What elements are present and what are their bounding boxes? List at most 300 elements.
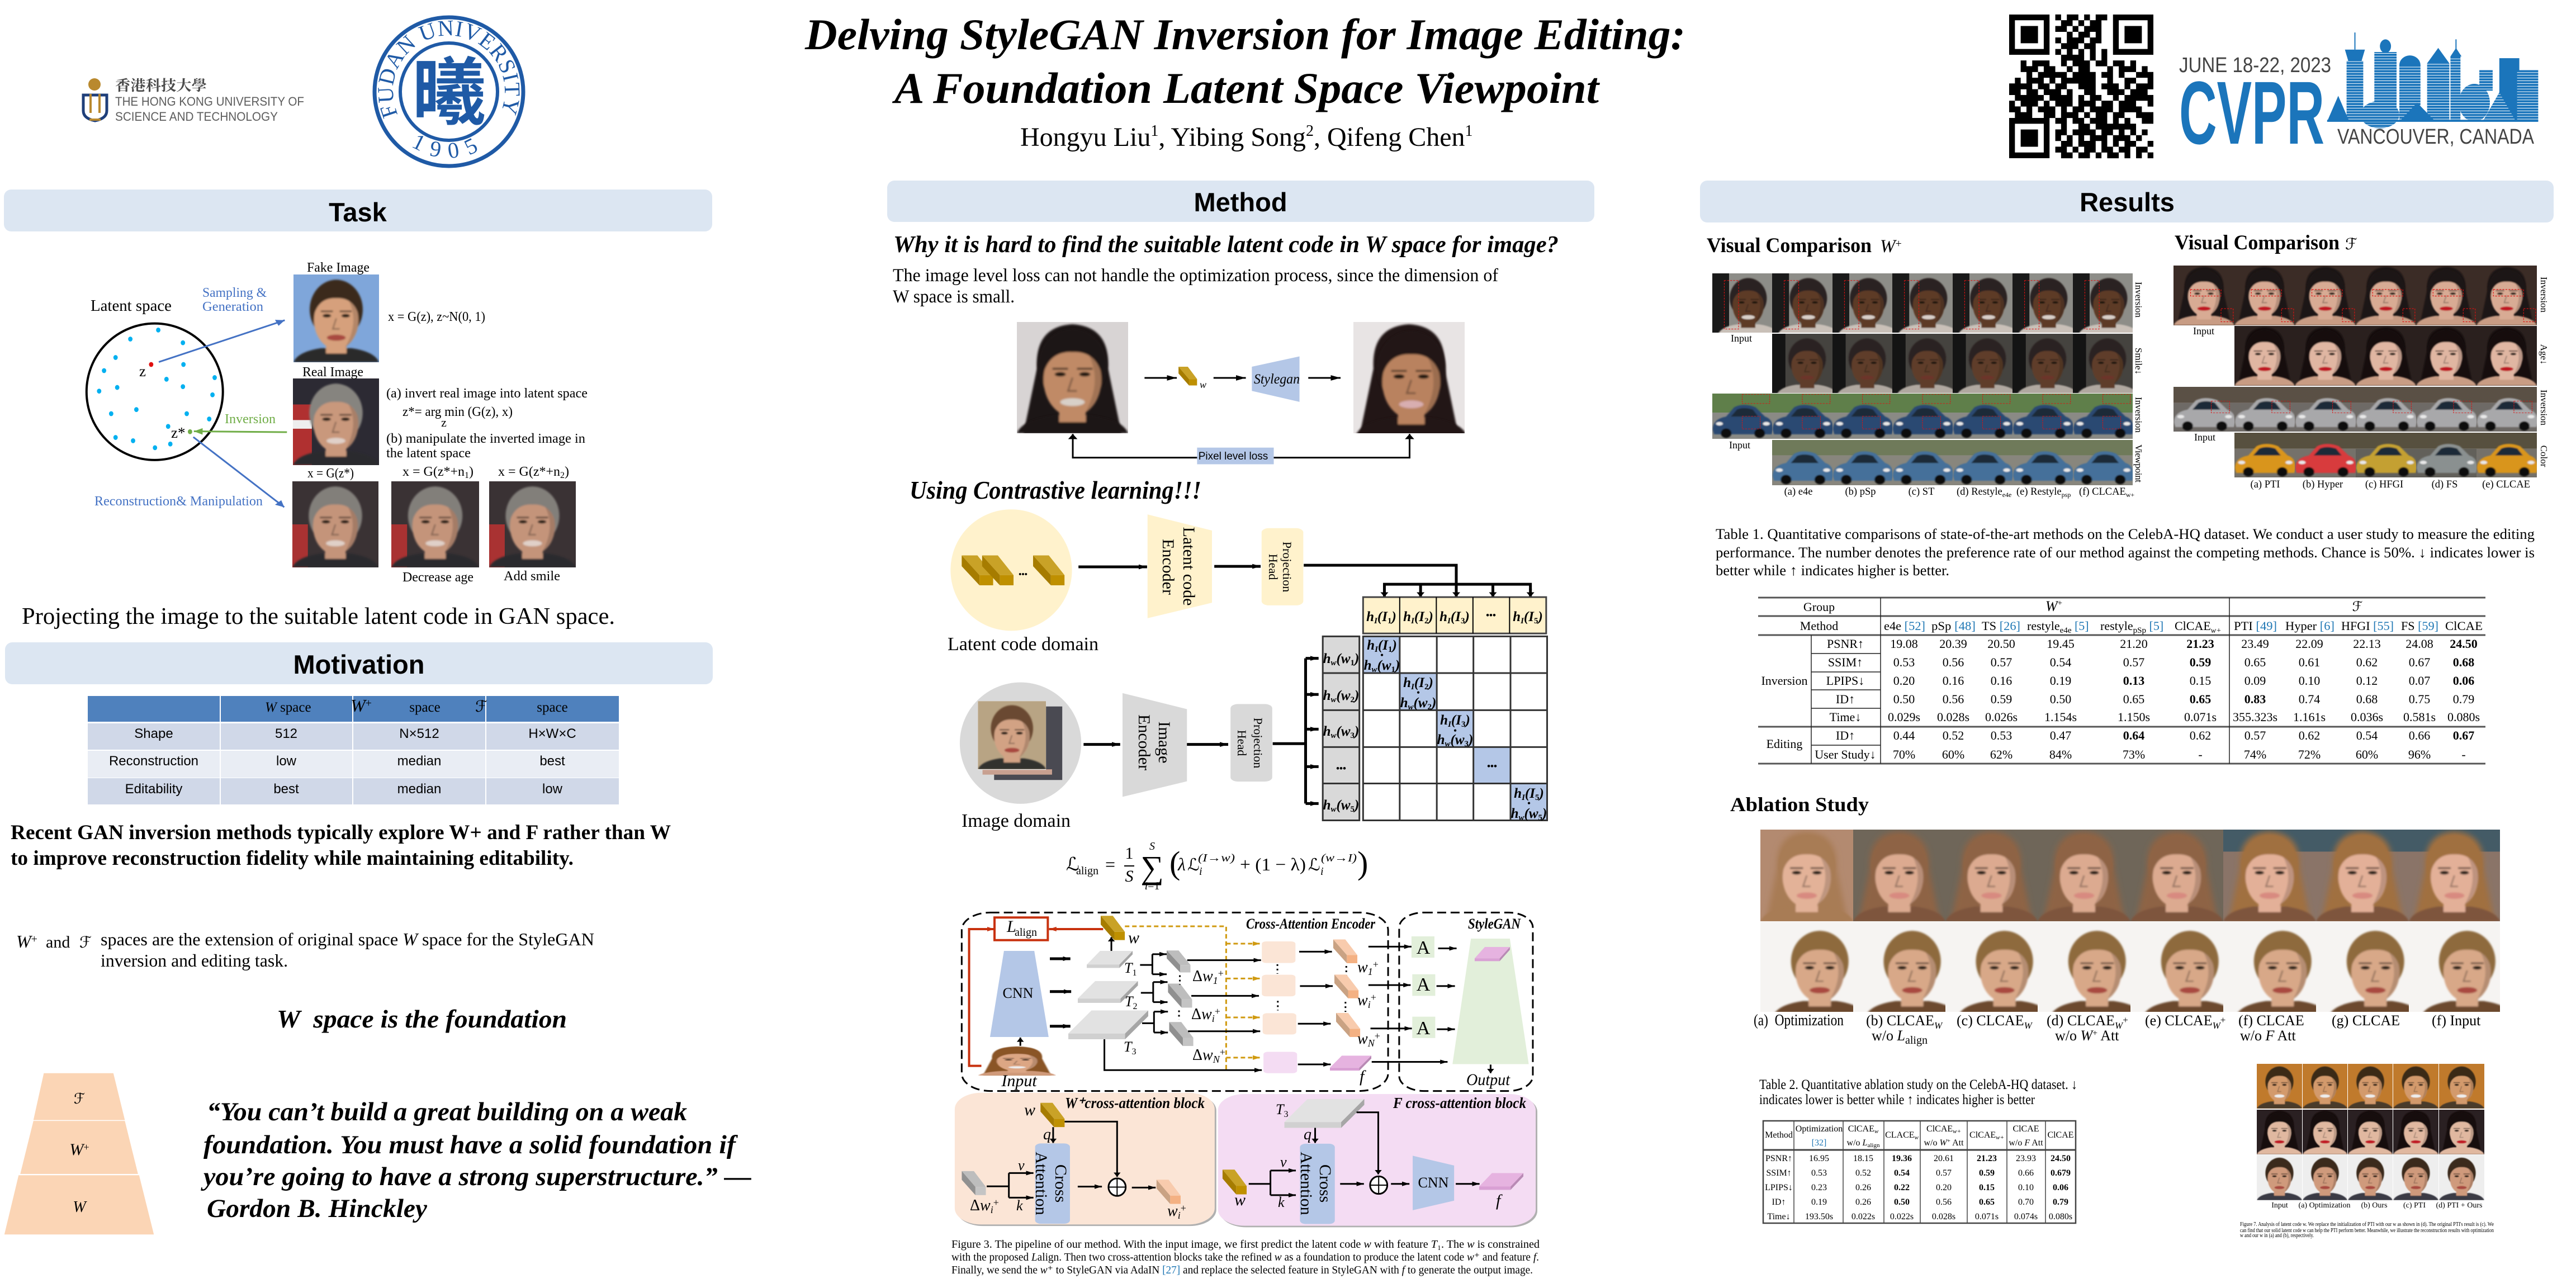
table 1: Editing bbox=[1767, 737, 1802, 751]
table 1: 72% bbox=[2298, 747, 2321, 761]
grid labels: h bbox=[1511, 806, 1519, 821]
table 1: 0.080s bbox=[2447, 710, 2480, 724]
table 1: 0.62 bbox=[2299, 728, 2320, 742]
title: Delving StyleGAN Inversion for Image Editing: bbox=[804, 10, 1685, 59]
cross-attention encoder shapes bbox=[962, 912, 1533, 1091]
grid labels: ) bbox=[1390, 609, 1396, 624]
table 1: - bbox=[2461, 747, 2466, 761]
table: latent spaces: + bbox=[366, 697, 372, 709]
formula: alignment loss: ) bbox=[1357, 845, 1368, 881]
image encoder text: Encoder bbox=[1135, 714, 1153, 770]
task labels: Real Image bbox=[302, 365, 363, 380]
table 1: 0.44 bbox=[1893, 728, 1915, 742]
grid labels: ( bbox=[1378, 638, 1384, 653]
table: latent spaces: W space bbox=[265, 700, 311, 715]
table 1: 1.154s bbox=[2044, 710, 2077, 724]
table 2: 0.50 bbox=[1894, 1197, 1910, 1207]
labels: figure 7: (a) Optimization bbox=[2299, 1201, 2350, 1210]
grid labels: h bbox=[1400, 695, 1408, 711]
grid labels: w bbox=[1341, 724, 1351, 739]
caption: figure 7: Figure 7. Analysis of latent code w. We replace the initialization of PTI with our w as shown in (d). The original PTI's result is (c). We bbox=[2240, 1221, 2494, 1228]
table 2: 21.23 bbox=[1977, 1154, 1997, 1163]
table 2: Method bbox=[1765, 1130, 1793, 1140]
grid labels: h bbox=[1323, 651, 1331, 666]
table 1: 0.57 bbox=[2123, 655, 2144, 669]
grid labels: • bbox=[1453, 726, 1457, 736]
grid labels: • bbox=[1380, 651, 1384, 660]
table 1: 1.161s bbox=[2293, 710, 2326, 724]
table 1: 0.16 bbox=[1943, 674, 1964, 688]
table 1: 0.10 bbox=[2299, 674, 2320, 688]
table 1: PSNR↑ bbox=[1827, 637, 1864, 651]
table 1: w+ bbox=[2211, 627, 2222, 635]
diagram: pixel level loss: w bbox=[1200, 379, 1206, 390]
table 2: Optimization bbox=[1796, 1124, 1843, 1134]
grid labels: 3 bbox=[1465, 740, 1469, 749]
labels: align bbox=[1905, 1034, 1928, 1046]
blocks text bbox=[970, 1095, 1526, 1221]
table 2: 0.022s bbox=[1852, 1212, 1875, 1221]
grid labels: I bbox=[1374, 645, 1379, 654]
grid labels: I bbox=[1455, 609, 1461, 624]
cross-attention encoder text: align bbox=[1015, 926, 1037, 939]
labels: (b) CLCAE bbox=[1866, 1012, 1934, 1029]
table 2: 0.54 bbox=[1894, 1168, 1910, 1178]
latent encoder text bbox=[948, 527, 1294, 655]
latent encoder text: Latent code bbox=[1180, 527, 1198, 605]
table 1: pSp bbox=[2133, 626, 2146, 635]
table 1: Method bbox=[1800, 619, 1838, 633]
table 1: pSp [48] bbox=[1931, 619, 1976, 633]
labels: W bbox=[2115, 1020, 2124, 1031]
cross-attention encoder text: i bbox=[1368, 999, 1371, 1010]
logo: HKUST bbox=[83, 74, 304, 124]
caption: table 2: indicates lower is better while ↑ indicates higher is better bbox=[1759, 1092, 2035, 1107]
task labels bbox=[91, 261, 588, 585]
cross-attention encoder text: 1 bbox=[1213, 975, 1218, 986]
table 2: 0.19 bbox=[1811, 1197, 1827, 1207]
grid labels: 1 bbox=[1351, 659, 1355, 667]
table 2: w bbox=[1915, 1134, 1919, 1141]
grid labels: h bbox=[1437, 732, 1445, 747]
diagram: pixel level loss: Pixel level loss bbox=[1199, 451, 1268, 462]
table 1: 0.13 bbox=[2123, 674, 2144, 688]
task labels: Decrease age bbox=[402, 570, 473, 585]
grid labels: I bbox=[1410, 683, 1415, 692]
labels: Input bbox=[2193, 325, 2214, 337]
grid labels: ( bbox=[1451, 713, 1457, 728]
grid labels: ) bbox=[1427, 609, 1433, 624]
authors: , Qifeng Chen bbox=[1314, 122, 1465, 152]
grid labels: w bbox=[1382, 658, 1391, 673]
heading: contrastive learning: Using Contrastive learning!!! bbox=[910, 476, 1201, 504]
grid labels: h bbox=[1513, 609, 1521, 624]
grid labels: 1 bbox=[1388, 645, 1392, 654]
quote bbox=[201, 1097, 751, 1223]
cross-attention encoder text: f bbox=[1360, 1067, 1366, 1086]
grid labels: ( bbox=[1414, 695, 1419, 711]
table 1: 0.67 bbox=[2409, 655, 2430, 669]
table 1: ID↑ bbox=[1836, 728, 1855, 742]
pyramid: latent spaces bbox=[4, 1073, 154, 1234]
table 2: w/o W bbox=[1924, 1138, 1947, 1148]
task labels: Reconstruction& Manipulation bbox=[94, 494, 263, 509]
cross-attention encoder text: Δw bbox=[1191, 1006, 1212, 1023]
table 1: 70% bbox=[1893, 747, 1915, 761]
table 1: 0.071s bbox=[2184, 710, 2217, 724]
table 2: ClCAE bbox=[2012, 1124, 2039, 1134]
logo: CVPR 2023: VANCOUVER, CANADA bbox=[2337, 125, 2535, 149]
table 1: SSIM↑ bbox=[1828, 655, 1863, 669]
table 2: 0.06 bbox=[2053, 1183, 2068, 1192]
formula: alignment loss: ∑ bbox=[1140, 849, 1164, 886]
grid labels: ••• bbox=[1486, 610, 1496, 621]
grid labels: w bbox=[1445, 740, 1451, 749]
labels: figure 7: (d) PTI + Ours bbox=[2436, 1201, 2482, 1210]
table 2: 20.61 bbox=[1934, 1154, 1954, 1163]
panel: figure 7 images bbox=[2257, 1064, 2484, 1200]
task labels: x = G(z*) bbox=[307, 466, 354, 481]
labels: + bbox=[2220, 1015, 2225, 1025]
grid labels: 1 bbox=[1391, 665, 1395, 674]
task labels: (a) invert real image into latent space bbox=[386, 386, 588, 401]
grid labels: ) bbox=[1394, 658, 1400, 673]
grid labels: 5 bbox=[1535, 793, 1539, 802]
labels: Att bbox=[2097, 1027, 2119, 1044]
table 1: 19.08 bbox=[1890, 637, 1918, 651]
table 1 bbox=[1758, 598, 2485, 764]
heading: W bbox=[1880, 236, 1895, 257]
grid labels: I bbox=[1530, 786, 1535, 801]
table 1: 0.026s bbox=[1985, 710, 2018, 724]
table 2: CLACE bbox=[1885, 1130, 1915, 1140]
cross-attention encoder text: 1 bbox=[1368, 966, 1373, 977]
table 2: align bbox=[1867, 1142, 1880, 1149]
table 1: 0.56 bbox=[1943, 692, 1964, 706]
labels: Input bbox=[2194, 432, 2215, 443]
table 1: 0.67 bbox=[2453, 728, 2474, 742]
task labels: Add smile bbox=[504, 569, 560, 584]
blocks text: q bbox=[1043, 1126, 1051, 1143]
grid labels: h bbox=[1323, 724, 1331, 739]
table 1: 73% bbox=[2123, 747, 2145, 761]
table: latent spaces: best bbox=[539, 754, 565, 769]
table 1: TS [26] bbox=[1982, 619, 2020, 633]
table 1: PTI [49] bbox=[2234, 619, 2277, 633]
table 1: 0.54 bbox=[2050, 655, 2071, 669]
cross-attention encoder text: Output bbox=[1466, 1071, 1510, 1089]
caption: figure 7: w and our w in (a) and (b), respectively. bbox=[2240, 1233, 2314, 1239]
image branch bbox=[960, 636, 1547, 820]
logo: CVPR 2023: JUNE 18-22, 2023 bbox=[2179, 54, 2331, 77]
blocks text: f bbox=[1496, 1191, 1503, 1210]
grid labels: ( bbox=[1524, 609, 1530, 624]
caption: table 1: performance. The number denotes the preference rate of our method against the competing methods. Chance is 50%. ↓ indicates lower is bbox=[1716, 544, 2535, 561]
latent code branch bbox=[950, 509, 1546, 633]
blocks text: F cross-attention block bbox=[1393, 1095, 1526, 1111]
grid labels: ) bbox=[1541, 806, 1547, 821]
table 1: User Study↓ bbox=[1815, 747, 1876, 761]
table 2: 0.79 bbox=[2053, 1197, 2068, 1207]
table 1: 0.15 bbox=[2190, 674, 2211, 688]
table 2: 0.20 bbox=[1936, 1183, 1952, 1192]
task labels: Fake Image bbox=[307, 261, 370, 275]
caption: table 1: Table 1. Quantitative comparisons of state-of-the-art methods on the CelebA-HQ dataset. We conduct a user study to measure the editing bbox=[1716, 526, 2535, 542]
labels: + bbox=[2123, 1015, 2128, 1025]
table 1: 0.16 bbox=[1991, 674, 2012, 688]
table 2: 0.26 bbox=[1855, 1183, 1871, 1192]
cross-attention encoder text: i bbox=[1212, 1013, 1215, 1024]
grid labels: 3 bbox=[1461, 720, 1465, 729]
table 1: 0.12 bbox=[2356, 674, 2378, 688]
grid labels: 3 bbox=[1461, 617, 1465, 626]
labels: (c) CLCAE bbox=[1957, 1012, 2024, 1029]
table 2: 0.074s bbox=[2014, 1212, 2038, 1221]
table: latent spaces: Editability bbox=[125, 782, 182, 797]
heading: W space is the foundation: W space is the foundation bbox=[277, 1005, 567, 1033]
table 1: ClCAE bbox=[2445, 619, 2483, 633]
formula: alignment loss: ℒ bbox=[1066, 853, 1079, 875]
grid labels: h bbox=[1403, 675, 1411, 690]
grid labels: ) bbox=[1353, 688, 1359, 703]
grid labels: 1 bbox=[1388, 617, 1391, 626]
table 1: restyle bbox=[2100, 619, 2133, 633]
table 1: 60% bbox=[1942, 747, 1964, 761]
grid labels: w bbox=[1331, 695, 1337, 704]
cross-attention encoder text: + bbox=[1373, 959, 1379, 970]
authors: 1 bbox=[1150, 122, 1158, 140]
table 1: 0.68 bbox=[2453, 655, 2474, 669]
table 1: 0.56 bbox=[1943, 655, 1964, 669]
table 2: 0.26 bbox=[1855, 1197, 1871, 1207]
table 1: 0.74 bbox=[2299, 692, 2320, 706]
blocks text: i bbox=[1178, 1210, 1181, 1221]
cross-attention encoder text: w bbox=[1357, 1030, 1368, 1048]
table: latent spaces: space bbox=[409, 700, 441, 715]
labels: (a) e4e bbox=[1784, 486, 1812, 498]
grid labels: 2 bbox=[1424, 617, 1428, 626]
table 1: 0.79 bbox=[2453, 692, 2474, 706]
grid labels: 2 bbox=[1424, 683, 1428, 692]
cross-attention encoder text: T bbox=[1125, 993, 1133, 1010]
grid labels: h bbox=[1323, 688, 1331, 703]
cross-attention encoder text: T bbox=[1124, 1039, 1131, 1055]
table 1: 20.39 bbox=[1939, 637, 1967, 651]
formula: alignment loss: ( bbox=[1169, 845, 1180, 881]
blocks text: w bbox=[1024, 1101, 1035, 1119]
labels: figure 7: (c) PTI bbox=[2403, 1201, 2426, 1210]
text: extension of W space: + bbox=[31, 933, 37, 945]
table 1: 0.57 bbox=[1991, 655, 2012, 669]
table 1: 74% bbox=[2244, 747, 2266, 761]
heading: Motivation bbox=[5, 642, 713, 684]
task labels: Generation bbox=[202, 300, 263, 314]
cross-attention encoder text: + bbox=[1215, 1006, 1220, 1017]
table 1: 0.06 bbox=[2453, 674, 2474, 688]
grid labels: h bbox=[1364, 658, 1372, 673]
table 1: [5] bbox=[2075, 619, 2089, 633]
task labels: ) bbox=[469, 465, 473, 479]
table 1: 0.47 bbox=[2050, 728, 2071, 742]
table 1: + bbox=[2058, 599, 2062, 608]
labels: (c) HFGI bbox=[2365, 479, 2403, 490]
table: latent spaces: H×W×C bbox=[528, 726, 576, 741]
grid labels: 2 bbox=[1351, 695, 1355, 704]
caption: figure 3: Figure 3. The pipeline of our method. With the input image, we first predict the latent code w with feature T₁. The w is constrained bbox=[951, 1238, 1540, 1251]
panel: visual comparison W+ bbox=[1707, 234, 2144, 499]
table 1: FS [59] bbox=[2401, 619, 2438, 633]
text: extension of W space: ℱ bbox=[79, 933, 92, 951]
cross-attention encoder text: CNN bbox=[1003, 985, 1034, 1001]
table 1: 0.54 bbox=[2356, 728, 2378, 742]
table 1: restyle bbox=[2027, 619, 2060, 633]
grid labels: w bbox=[1341, 651, 1351, 666]
table 2: 16.95 bbox=[1809, 1154, 1829, 1163]
heading: Results: Results bbox=[2080, 187, 2175, 217]
table 2: SSIM↑ bbox=[1766, 1168, 1792, 1178]
grid labels: ( bbox=[1337, 798, 1342, 813]
heading: Task bbox=[4, 190, 712, 231]
diagram: contrastive learning bbox=[948, 509, 1547, 831]
pyramid: latent spaces: W bbox=[73, 1199, 87, 1216]
formula: alignment loss: S bbox=[1149, 840, 1155, 853]
table 2: 0.10 bbox=[2018, 1183, 2034, 1192]
labels: (g) CLCAE bbox=[2332, 1012, 2400, 1029]
latent encoder text: Encoder bbox=[1159, 539, 1177, 595]
task labels: ) bbox=[565, 465, 569, 479]
labels: (a) PTI bbox=[2251, 479, 2280, 490]
table 2: 0.15 bbox=[1979, 1183, 1995, 1192]
table 2: 0.080s bbox=[2049, 1212, 2072, 1221]
labels bbox=[2193, 277, 2549, 490]
table 1: 0.50 bbox=[2050, 692, 2071, 706]
cross-attention encoder text: N bbox=[1213, 1054, 1220, 1065]
table 1: 0.50 bbox=[1893, 692, 1915, 706]
labels: w/o W bbox=[2055, 1027, 2092, 1044]
formula: alignment loss: S bbox=[1125, 867, 1134, 886]
logo: Fudan University: 1905 bbox=[413, 136, 477, 158]
formula: alignment loss: ℒ bbox=[1308, 855, 1320, 875]
blocks text: v bbox=[1018, 1157, 1025, 1173]
task labels: x = G(z*+n bbox=[402, 465, 465, 479]
text: motivation statement bbox=[11, 821, 671, 870]
table 2: 0.071s bbox=[1975, 1212, 1999, 1221]
image encoder text: Image domain bbox=[962, 811, 1071, 831]
table: latent spaces: ℱ bbox=[475, 697, 487, 716]
grid labels: h bbox=[1514, 786, 1522, 801]
labels: Smile↓ bbox=[2133, 348, 2144, 375]
blocks text: T bbox=[1276, 1101, 1284, 1117]
grid labels: ) bbox=[1537, 609, 1543, 624]
panel: ablation images bbox=[1754, 830, 2513, 1046]
cross-attention encoder text: A bbox=[1417, 974, 1431, 995]
grid labels: I bbox=[1521, 793, 1526, 802]
table 2: 18.15 bbox=[1853, 1154, 1873, 1163]
task labels: 1 bbox=[465, 471, 469, 480]
logo: HKUST: THE HONG KONG UNIVERSITY OF bbox=[115, 94, 304, 108]
text: why explanation: The image level loss can not handle the optimization process, since the dimension of bbox=[893, 266, 1498, 286]
authors: Hongyu Liu bbox=[1020, 122, 1150, 152]
logo: Fudan University: FUDAN UNIVERSITY bbox=[378, 20, 520, 119]
table 1: e4e [52] bbox=[1884, 619, 1925, 633]
grid labels: w bbox=[1341, 798, 1351, 813]
grid labels: w bbox=[1331, 659, 1337, 667]
grid labels: ( bbox=[1337, 651, 1342, 666]
labels: (b) pSp bbox=[1845, 486, 1876, 498]
table 2: 0.56 bbox=[1936, 1197, 1952, 1207]
table 1: 0.59 bbox=[2190, 655, 2211, 669]
table 1: 0.65 bbox=[2190, 692, 2211, 706]
task labels: Sampling & bbox=[202, 286, 267, 300]
cross-attention encoder text: A bbox=[1417, 1018, 1431, 1039]
cross-attention encoder text: L bbox=[1006, 917, 1016, 936]
grid labels: I bbox=[1410, 617, 1415, 626]
formula: alignment loss: ℒ bbox=[1187, 855, 1200, 875]
logo: HKUST: SCIENCE AND TECHNOLOGY bbox=[115, 110, 278, 124]
formula: alignment loss: (I→w) bbox=[1198, 852, 1235, 864]
grid labels: I bbox=[1382, 638, 1388, 653]
grid labels: ( bbox=[1525, 786, 1531, 801]
table 2: PSNR↑ bbox=[1765, 1154, 1792, 1163]
table 1: 0.83 bbox=[2244, 692, 2266, 706]
labels: (d) CLCAE bbox=[2047, 1012, 2115, 1029]
table 2: 0.028s bbox=[1932, 1212, 1955, 1221]
caption: table 1: better while ↑ indicates higher is better. bbox=[1716, 562, 1949, 579]
grid labels: ) bbox=[1464, 713, 1470, 728]
labels: (e) CLCAE bbox=[2482, 479, 2530, 490]
logo: CVPR 2023: CVPR bbox=[2179, 63, 2324, 163]
table 2: 0.22 bbox=[1894, 1183, 1910, 1192]
caption: figure 3 bbox=[951, 1238, 1540, 1276]
table 1: 0.65 bbox=[2123, 692, 2144, 706]
grid labels: ••• bbox=[1336, 763, 1346, 774]
grid labels: 5 bbox=[1538, 813, 1542, 822]
table: latent spaces: Reconstruction bbox=[109, 754, 198, 769]
labels: W bbox=[1934, 1020, 1943, 1031]
table 1: e4e bbox=[2060, 626, 2072, 635]
labels: Inversion bbox=[2133, 397, 2144, 433]
blocks text: Cross bbox=[1316, 1164, 1334, 1202]
grid labels: h bbox=[1323, 798, 1331, 813]
blocks text: w bbox=[1234, 1191, 1246, 1209]
table 1: 22.09 bbox=[2295, 637, 2323, 651]
table 1: 0.64 bbox=[2123, 728, 2144, 742]
formula: alignment loss: (w→I) bbox=[1321, 852, 1357, 864]
table 2: 0.022s bbox=[1890, 1212, 1914, 1221]
pyramid: latent spaces: + bbox=[83, 1142, 89, 1153]
table 1: 0.53 bbox=[1893, 655, 1915, 669]
grid labels: w bbox=[1372, 665, 1378, 674]
grid labels: ( bbox=[1377, 658, 1383, 673]
cross-attention encoder text: Input bbox=[1001, 1072, 1037, 1090]
table 2: ClCAE bbox=[2047, 1130, 2074, 1140]
table: latent spaces: W bbox=[351, 695, 366, 716]
heading: ℱ bbox=[2345, 235, 2357, 253]
table 2: ID↑ bbox=[1772, 1197, 1786, 1207]
grid labels: ) bbox=[1427, 675, 1433, 690]
heading: Method: Method bbox=[1194, 187, 1287, 217]
table 1: W bbox=[2045, 598, 2058, 614]
table 1: 0.75 bbox=[2409, 692, 2430, 706]
grid labels: ( bbox=[1337, 724, 1342, 739]
task labels: x = G(z*+n bbox=[498, 465, 560, 479]
table 2: 0.59 bbox=[1979, 1168, 1995, 1178]
table 1: Hyper [6] bbox=[2285, 619, 2334, 633]
grid labels: h bbox=[1403, 609, 1411, 624]
table 1: 62% bbox=[1990, 747, 2012, 761]
table 1: 0.62 bbox=[2356, 655, 2378, 669]
formula: alignment loss: i=1 bbox=[1145, 880, 1159, 892]
